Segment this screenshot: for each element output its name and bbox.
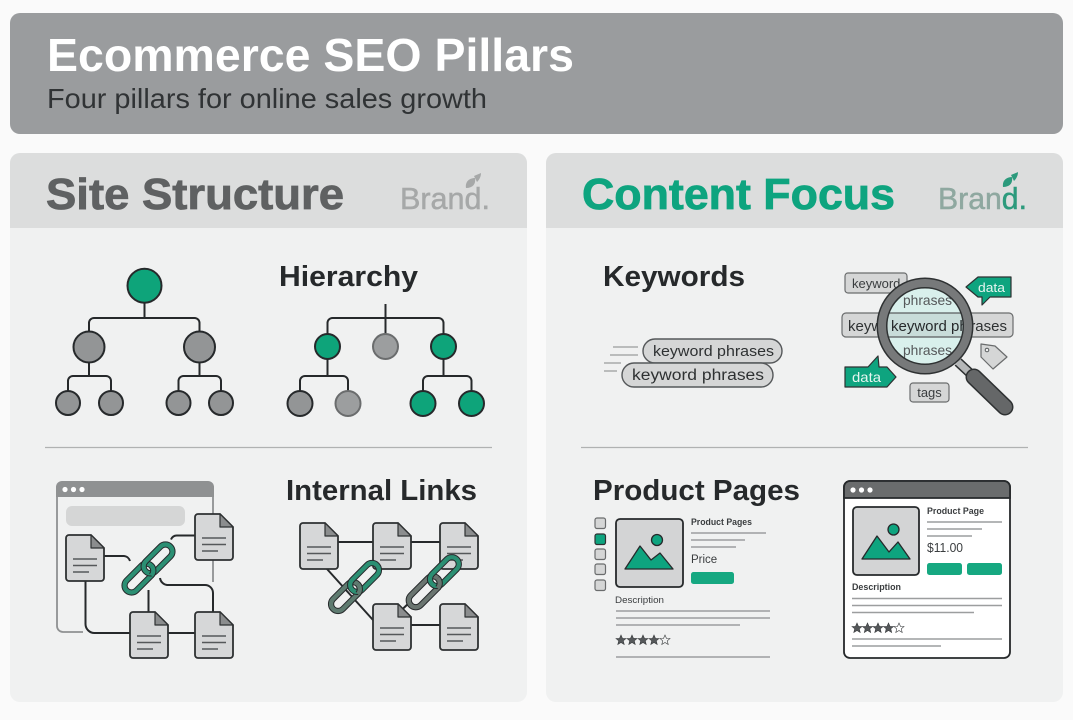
magnifier handle [958,362,1005,407]
browser window with linked documents [56,481,233,658]
icon: chain link right [406,554,462,610]
keyword phrase pills [604,339,782,387]
panel: site structure [10,153,527,702]
star rating [616,635,670,644]
subheading: hierarchy: Hierarchy [279,261,418,293]
product page browser card: Product Page [927,506,984,517]
product image [853,507,919,575]
tag: data bottom: data [852,369,881,385]
subtitle: Four pillars for online sales growth [47,83,487,114]
header banner [10,13,1063,134]
product page wireframe: Description [615,595,664,605]
product image [616,519,683,587]
heading: content focus: Content Focus [582,170,895,219]
bar: keyword phrases [842,313,1013,337]
keyword phrase pills: keyword phrases [632,367,764,384]
tree diagram: highlighted hierarchy [288,304,484,416]
magnifier lens: phrases [903,342,952,358]
tag: tags [910,383,949,402]
tag: data top: data [978,280,1006,295]
tag: keyword [845,273,907,293]
subheading: product pages: Product Pages [593,475,800,507]
icon: chain link [122,542,175,595]
icon: price tag [981,344,1007,369]
tag: data top [966,277,1011,305]
product page wireframe [595,517,770,657]
product page browser card [844,481,1010,658]
star rating [852,623,904,632]
keyword phrase pills: keyword phrases [653,343,774,360]
subheading: internal links: Internal Links [286,475,477,507]
icon: chain link left [328,560,382,614]
product page browser card: $11.00 [927,540,963,555]
magnifier lens: keyword phrases [891,318,1004,335]
linked documents network [300,523,478,650]
heading: site structure: Site Structure [46,170,344,219]
tag: tags: tags [917,385,942,400]
subheading: keywords: Keywords [603,261,745,293]
action buttons [927,563,1002,575]
panel: content focus [546,153,1063,702]
brand logo: Brand. [400,181,490,216]
magnifier with keyword tags [842,273,1013,407]
tree diagram: site hierarchy [56,269,233,415]
magnifier lens [876,278,974,374]
brand logo green: Brand. [938,181,1027,216]
tag: keyword: keyword [852,276,900,291]
product page browser card: Description [852,582,901,593]
tag: data bottom [845,356,896,387]
product page wireframe: Product Pages [691,517,752,527]
thumbnail list [595,518,606,590]
magnifier lens: phrases [903,292,952,308]
bar: keyword phrases: rases [970,318,1007,335]
buy button [691,572,734,584]
product page wireframe: Price [691,554,717,566]
title: Ecommerce SEO Pillars [47,29,574,81]
bar: keyword phrases: keyw [848,318,882,335]
